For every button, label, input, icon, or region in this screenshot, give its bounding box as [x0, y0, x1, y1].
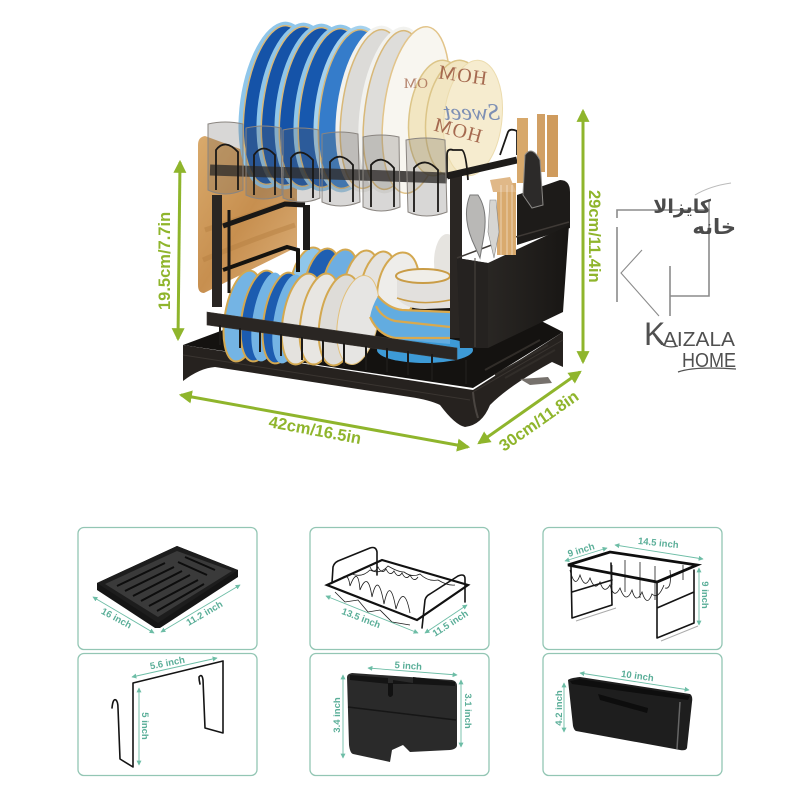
utensil holder drawing	[347, 673, 457, 762]
dimension: height 19.5cm: 19.5cm/7.7in	[156, 212, 174, 310]
drinking glasses	[208, 122, 447, 216]
logo: Kaizala Home	[617, 183, 736, 372]
shelf dimensions	[565, 536, 710, 625]
logo monogram lines	[617, 200, 709, 316]
cutlery bin drawing	[568, 677, 692, 750]
basket dimensions: 13.5 inch	[340, 606, 382, 631]
drip tray	[183, 300, 563, 427]
lower front row plates	[217, 268, 386, 369]
tray dimensions: 11.2 inch	[185, 599, 225, 629]
knife handles and scissors	[517, 114, 558, 208]
bowls	[370, 269, 473, 363]
logo wordmark	[644, 316, 736, 372]
panel: drip tray	[78, 528, 257, 650]
chopsticks and cutlery	[466, 177, 516, 258]
dimension: width 42cm	[181, 395, 468, 448]
lower rack rail and tines	[207, 312, 466, 384]
cream lettered plates: OM	[404, 76, 428, 92]
logo wordmark: AIZALA	[663, 329, 736, 351]
panel: lower basket	[310, 528, 489, 650]
hook dimensions: 5 inch	[139, 712, 150, 740]
cream lettered plates: HOM	[431, 114, 484, 148]
logo: Kaizala Home: خانه	[692, 215, 736, 239]
basket dimensions: 11.5 inch	[431, 608, 471, 639]
hook wire drawing	[112, 661, 223, 767]
shelf wire drawing	[568, 552, 698, 641]
shelf dimensions: 9 inch	[567, 541, 596, 560]
panel: utensil holder	[310, 654, 489, 776]
rack posts and shelves	[210, 130, 517, 338]
panel: hook bracket	[78, 654, 257, 776]
upper tier plates: blue and white	[229, 17, 459, 198]
shelf dimensions: 14.5 inch	[637, 536, 679, 551]
utensil holder dimensions: 5 inch	[394, 660, 422, 673]
panel: cutlery bin	[543, 654, 722, 776]
utensil holder dimensions: 3.4 inch	[332, 697, 343, 733]
cutlery bin dimensions: 4.2 inch	[554, 690, 565, 726]
basket dimensions	[326, 596, 471, 639]
logo wordmark: K	[644, 316, 665, 352]
tray dimensions: 16 inch	[99, 606, 133, 631]
hook dimensions: 5.6 inch	[149, 655, 186, 672]
caddy with knife block	[457, 180, 570, 348]
shelf dimensions: 9 inch	[699, 581, 710, 609]
dimension: height 29cm: 29cm/11.4in	[585, 190, 603, 283]
cutting board	[198, 136, 297, 293]
cream lettered plates	[403, 57, 508, 179]
logo wordmark: HOME	[682, 350, 736, 372]
panel: upper shelf	[543, 528, 722, 650]
cream lettered plates: Sweet	[443, 100, 500, 126]
hook dimensions	[132, 655, 217, 765]
tray drawing	[97, 546, 238, 628]
dimension: width 42cm: 42cm/16.5in	[267, 413, 363, 448]
tray dimensions	[93, 585, 240, 633]
logo arabic script: کایزالا	[653, 196, 712, 218]
lower back row plates	[284, 234, 460, 325]
dimension: depth 30cm: 30cm/11.8in	[496, 387, 582, 455]
utensil holder dimensions: 3.1 inch	[462, 693, 473, 729]
basket wire drawing	[327, 548, 468, 628]
utensil holder dimensions	[332, 660, 473, 758]
cutlery bin dimensions	[554, 669, 689, 732]
dimension: depth 30cm	[479, 372, 582, 455]
cutlery bin dimensions: 10 inch	[620, 669, 655, 684]
cream lettered plates: HOM	[436, 61, 488, 90]
product photo: two-tier dish rack	[183, 17, 570, 427]
